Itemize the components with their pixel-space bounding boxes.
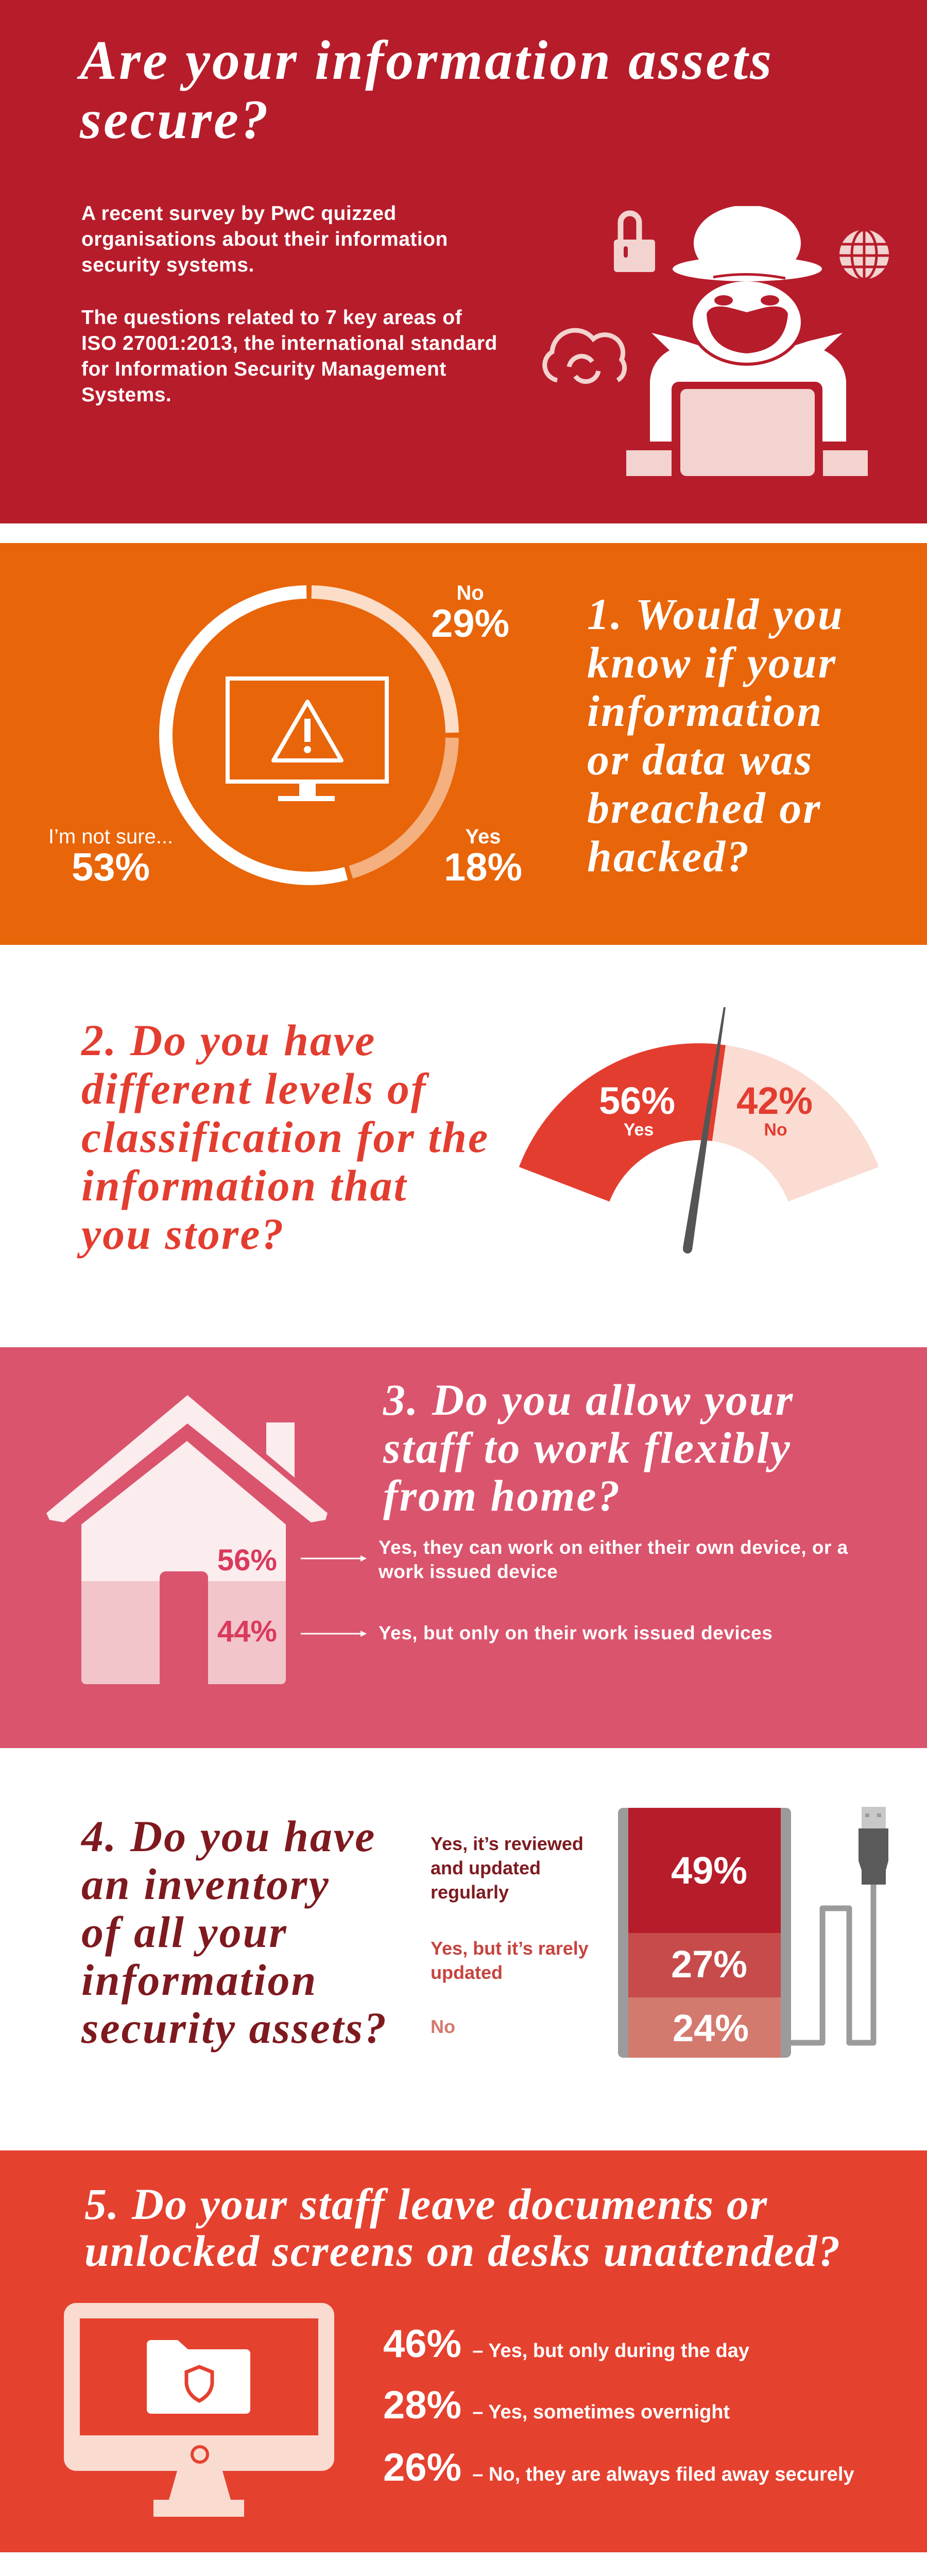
- intro text: A recent survey by PwC quizzed: [81, 202, 397, 225]
- heading: question 1: hacked?: [587, 832, 750, 881]
- heading: question 1: 1. Would you: [587, 589, 844, 639]
- icon: hacker with lock, globe and cloud: [542, 206, 889, 476]
- heading: question 5: [84, 2179, 841, 2276]
- label: no 29%: 29%: [431, 602, 509, 646]
- heading: question 2: information that: [81, 1161, 407, 1210]
- answer labels Q4: Yes, it’s reviewed: [431, 1833, 583, 1854]
- icon: house chart: [46, 1395, 367, 1684]
- answer text 44%: Yes, but only on their work issued devices: [379, 1622, 772, 1643]
- heading: question 3: staff to work flexibly: [383, 1423, 792, 1472]
- heading: question 1: know if your: [587, 638, 837, 687]
- icon: usb cable: [791, 1880, 873, 2043]
- panel: header: [0, 0, 927, 523]
- chart: battery Q4: 27%: [671, 1943, 747, 1986]
- answer text 56%: work issued device: [379, 1561, 558, 1582]
- chart: gauge Q2: [519, 1007, 879, 1253]
- heading: question 1: [587, 589, 844, 881]
- intro text: security systems.: [81, 254, 254, 276]
- heading: question 4: of all your: [81, 1907, 288, 1957]
- answer labels Q4: [431, 1833, 589, 2037]
- icon: monitor with warning: [228, 679, 387, 782]
- heading: question 2: different levels of: [81, 1064, 427, 1113]
- answer labels Q4: Yes, but it’s rarely: [431, 1938, 589, 1959]
- answer list Q5: 46% – Yes, but only during the day: [383, 2322, 749, 2366]
- icon: house chart: 56%: [217, 1544, 277, 1577]
- heading: question 2: [77, 1015, 489, 1259]
- icon: monitor with folder: [64, 2303, 334, 2517]
- answer list Q5: 28% – Yes, sometimes overnight: [383, 2383, 730, 2427]
- gauge labels: 56%: [599, 1079, 675, 1122]
- heading: question 5: 5. Do your staff leave documents or: [84, 2179, 768, 2229]
- answer text 56%: Yes, they can work on either their own device, or a: [379, 1537, 848, 1558]
- icon: house chart: 44%: [217, 1615, 277, 1648]
- chart: battery Q4: [618, 1807, 888, 2058]
- answer text 56%: [378, 1537, 848, 1582]
- answer labels Q4: regularly: [431, 1882, 509, 1903]
- chart: donut Q1: [159, 585, 459, 885]
- intro text 2: Systems.: [81, 384, 171, 406]
- chart: gauge Q2: 42%: [736, 1079, 813, 1122]
- chart: battery Q4: 49%: [671, 1849, 747, 1892]
- icon: lock: [614, 213, 655, 272]
- intro text 2: for Information Security Management: [81, 358, 447, 380]
- label: no 29%: [431, 582, 509, 646]
- intro text 2: The questions related to 7 key areas of: [81, 307, 462, 329]
- label: yes 18%: Yes: [466, 825, 501, 848]
- heading: question 1: breached or: [587, 783, 822, 833]
- panel: Q1 breach awareness: [0, 543, 927, 945]
- heading: question 2: classification for the: [81, 1112, 489, 1162]
- heading: question 4: 4. Do you have: [81, 1811, 376, 1861]
- intro text: [81, 202, 448, 276]
- label: not sure 53%: [48, 825, 173, 889]
- title: secure?: [80, 89, 270, 150]
- icon: cloud sync: [545, 330, 625, 382]
- panel: Q5 unattended desks: [0, 2150, 927, 2552]
- heading: question 4: security assets?: [81, 2003, 388, 2053]
- heading: question 2: 2. Do you have: [81, 1015, 376, 1065]
- heading: question 3: from home?: [383, 1471, 621, 1520]
- chart: gauge Q2: No: [764, 1120, 787, 1140]
- chart: gauge Q2: Yes: [624, 1120, 654, 1140]
- title: [77, 30, 774, 150]
- intro text: organisations about their information: [81, 228, 448, 250]
- intro text 2: ISO 27001:2013, the international standard: [81, 332, 497, 354]
- heading: question 1: information: [587, 686, 823, 736]
- heading: question 4: information: [81, 1955, 317, 2005]
- heading: question 3: 3. Do you allow your: [383, 1375, 794, 1425]
- icon: globe: [839, 230, 889, 279]
- label: no 29%: No: [456, 582, 484, 604]
- label: not sure 53%: 53%: [72, 845, 150, 889]
- arrows: [301, 1558, 363, 1634]
- answer labels Q4: updated: [431, 1962, 503, 1983]
- needle: [683, 1007, 726, 1250]
- label: yes 18%: 18%: [444, 845, 522, 889]
- heading: question 3: [383, 1375, 794, 1520]
- answer list Q5: 26% – No, they are always filed away securely: [383, 2446, 854, 2489]
- heading: question 1: or data was: [587, 735, 813, 784]
- label: not sure 53%: I’m not sure...: [48, 825, 173, 848]
- icon: hacker: [626, 205, 868, 480]
- heading: question 4: [80, 1811, 388, 2053]
- panel: Q3 flexible working: [0, 1347, 927, 1748]
- heading: question 4: an inventory: [81, 1859, 330, 1909]
- intro text 2: [81, 307, 497, 406]
- answer labels Q4: and updated: [431, 1857, 541, 1878]
- heading: question 5: unlocked screens on desks unattended?: [84, 2226, 841, 2276]
- label: yes 18%: [444, 825, 522, 889]
- answer list Q5: [383, 2322, 854, 2489]
- answer labels Q4: No: [431, 2016, 455, 2037]
- title: Are your information assets: [80, 30, 774, 91]
- heading: question 2: you store?: [81, 1209, 285, 1259]
- chart: battery Q4: 24%: [673, 2007, 749, 2049]
